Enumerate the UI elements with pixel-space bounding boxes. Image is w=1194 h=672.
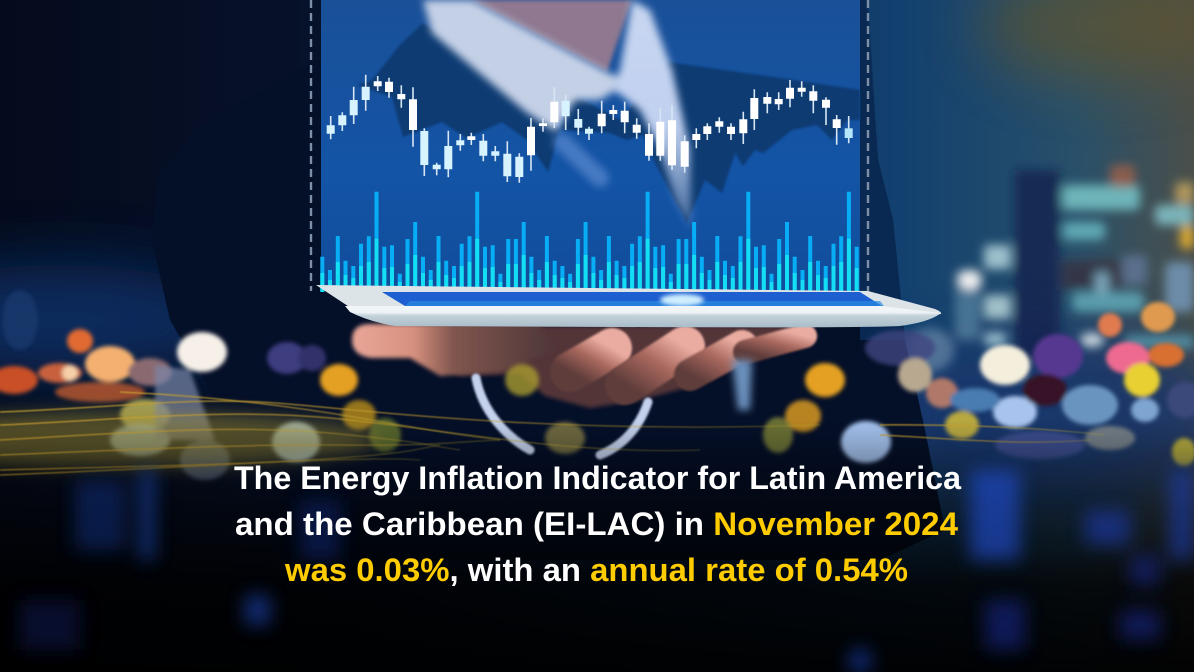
tablet <box>316 285 941 327</box>
tie highlight <box>562 142 600 178</box>
candle wicks <box>331 75 849 183</box>
thumb <box>352 324 555 376</box>
tablet edge <box>345 306 941 327</box>
headline line 1: The Energy Inflation Indicator for Latin America <box>234 460 962 496</box>
tablet top surface <box>316 285 941 314</box>
suit silhouette <box>152 0 945 560</box>
headline line 2: and the Caribbean (EI-LAC) in November 2024 <box>235 506 958 542</box>
suit lapel seen through panel <box>357 23 860 223</box>
pale candle bodies <box>331 87 589 177</box>
inner cyan bars <box>322 239 857 292</box>
last candle <box>845 128 853 138</box>
right collar and shirt strip <box>612 0 691 228</box>
golden light streaks <box>0 392 1105 475</box>
candlestick chart <box>331 75 849 183</box>
left collar <box>423 0 628 132</box>
finger one <box>570 348 612 372</box>
finger two <box>625 346 685 385</box>
palm <box>425 326 818 408</box>
outer blue bars <box>322 192 857 292</box>
bokeh lights centre and right <box>505 302 1194 466</box>
golden haze band <box>0 412 380 468</box>
headline text <box>234 460 962 588</box>
headline line 3: was 0.03%, with an annual rate of 0.54% <box>284 552 908 588</box>
neck skin <box>470 0 632 72</box>
tie lower part <box>732 360 752 410</box>
tablet projection panel <box>321 0 860 291</box>
bottom dark gradient <box>0 420 1194 672</box>
bokeh lights left <box>0 290 401 480</box>
blurred city buildings right <box>906 165 1194 372</box>
dashed guide lines <box>311 0 868 291</box>
finger three <box>690 346 742 375</box>
blue blurred reflections at bottom <box>20 470 1194 672</box>
pinky <box>745 336 805 352</box>
hand holding tablet <box>352 324 818 408</box>
shirt cuff <box>476 378 648 455</box>
white candle bodies <box>378 81 837 167</box>
volume bar chart <box>322 192 857 292</box>
tablet screen <box>382 292 882 306</box>
